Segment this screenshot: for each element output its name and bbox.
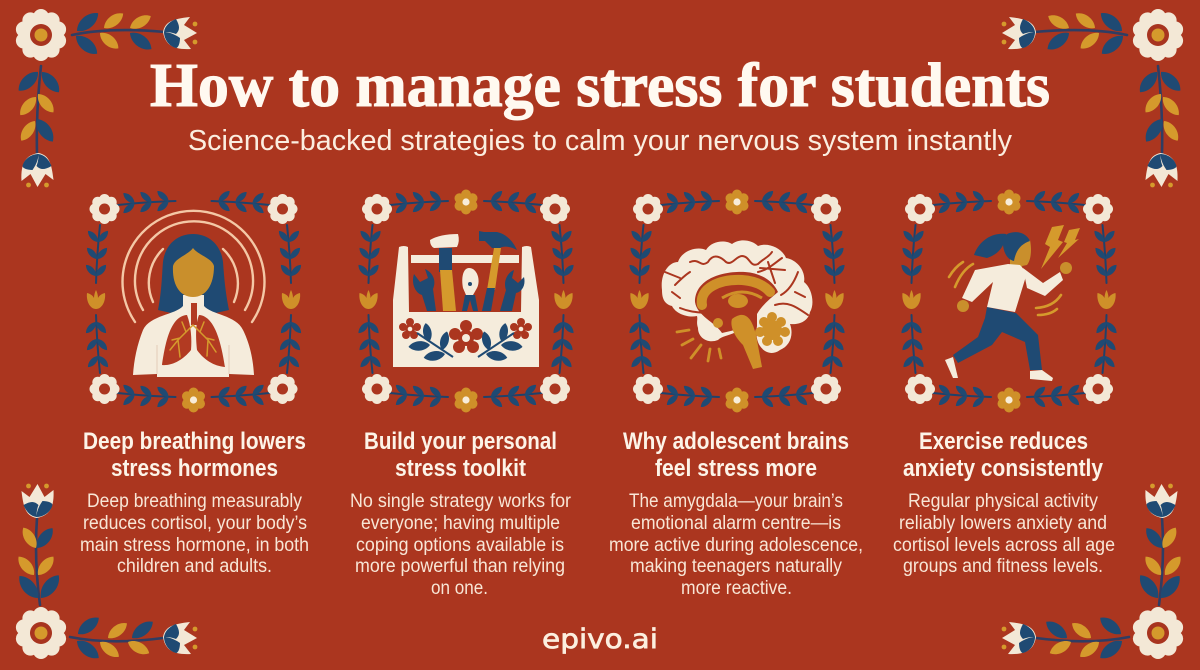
- floral frame 3: [627, 189, 847, 412]
- tool: claw hammer: [479, 231, 517, 311]
- body text 4: Regular physical activity: [908, 491, 1098, 512]
- body text 2: [350, 491, 572, 599]
- tool: left wrench: [413, 269, 436, 311]
- body text 4: cortisol levels across all age: [893, 535, 1115, 556]
- floral frame 2: [356, 189, 576, 412]
- heading 3: [623, 428, 849, 482]
- body text 2: everyone; having multiple: [361, 513, 560, 534]
- corner ornament: bottom right: [1002, 484, 1184, 663]
- body text 1: Deep breathing measurably: [87, 491, 302, 512]
- title: How to manage stress for students: [150, 52, 1050, 120]
- motion arcs: [949, 262, 1061, 315]
- body text 4: groups and fitness levels.: [903, 556, 1103, 577]
- body text 3: emotional alarm centre—is: [631, 513, 841, 534]
- body text 4: [893, 491, 1115, 577]
- box flowers and leaves: [399, 318, 532, 362]
- body text 3: more active during adolescence,: [609, 535, 863, 556]
- panel: exercise: [893, 189, 1119, 577]
- icon: person with lungs and breathing arcs: [123, 211, 265, 377]
- heading 3: feel stress more: [655, 455, 817, 482]
- icon: toolbox: [393, 231, 539, 367]
- body text 2: coping options available is: [356, 535, 564, 556]
- heading 1: [83, 428, 306, 482]
- tool: pliers: [462, 268, 479, 311]
- floral frame 4: [899, 189, 1119, 412]
- heading 4: [903, 428, 1104, 482]
- icon: running person: [945, 225, 1080, 381]
- footer brand: epivo.ai: [542, 624, 658, 655]
- tool: right wrench: [500, 270, 525, 311]
- body text 4: reliably lowers anxiety and: [899, 513, 1107, 534]
- body text 3: [609, 491, 863, 599]
- subtitle: Science-backed strategies to calm your nervous system instantly: [188, 125, 1012, 157]
- body text 2: on one.: [431, 578, 488, 599]
- heading 4: Exercise reduces: [919, 428, 1088, 455]
- tool: white hammer: [430, 234, 459, 311]
- panel: deep breathing: [80, 189, 309, 577]
- corner ornament: bottom left: [15, 484, 197, 663]
- icon: lightning bolts: [1041, 225, 1080, 269]
- body text 3: making teenagers naturally: [630, 556, 842, 577]
- heading 4: anxiety consistently: [903, 455, 1104, 482]
- body text 1: main stress hormone, in both: [80, 535, 309, 556]
- corner ornament: top right: [1002, 9, 1184, 187]
- body text 1: children and adults.: [117, 556, 272, 577]
- heading 2: [364, 428, 557, 482]
- floral frame 1: [84, 189, 303, 412]
- heading 3: Why adolescent brains: [623, 428, 849, 455]
- icon: brain cross-section: [662, 240, 812, 369]
- body text 3: The amygdala—your brain’s: [629, 491, 843, 512]
- corner ornament: top left: [15, 9, 197, 187]
- body text 2: more powerful than relying: [355, 556, 565, 577]
- heading 1: Deep breathing lowers: [83, 428, 306, 455]
- body text 3: more reactive.: [681, 578, 792, 599]
- panel: toolkit: [350, 189, 576, 599]
- panel: adolescent brain: [609, 189, 863, 599]
- body text 1: [80, 491, 309, 577]
- body text 2: No single strategy works for: [350, 491, 572, 512]
- heading 2: stress toolkit: [395, 455, 526, 482]
- heading 1: stress hormones: [111, 455, 278, 482]
- heading 2: Build your personal: [364, 428, 557, 455]
- body text 1: reduces cortisol, your body’s: [83, 513, 307, 534]
